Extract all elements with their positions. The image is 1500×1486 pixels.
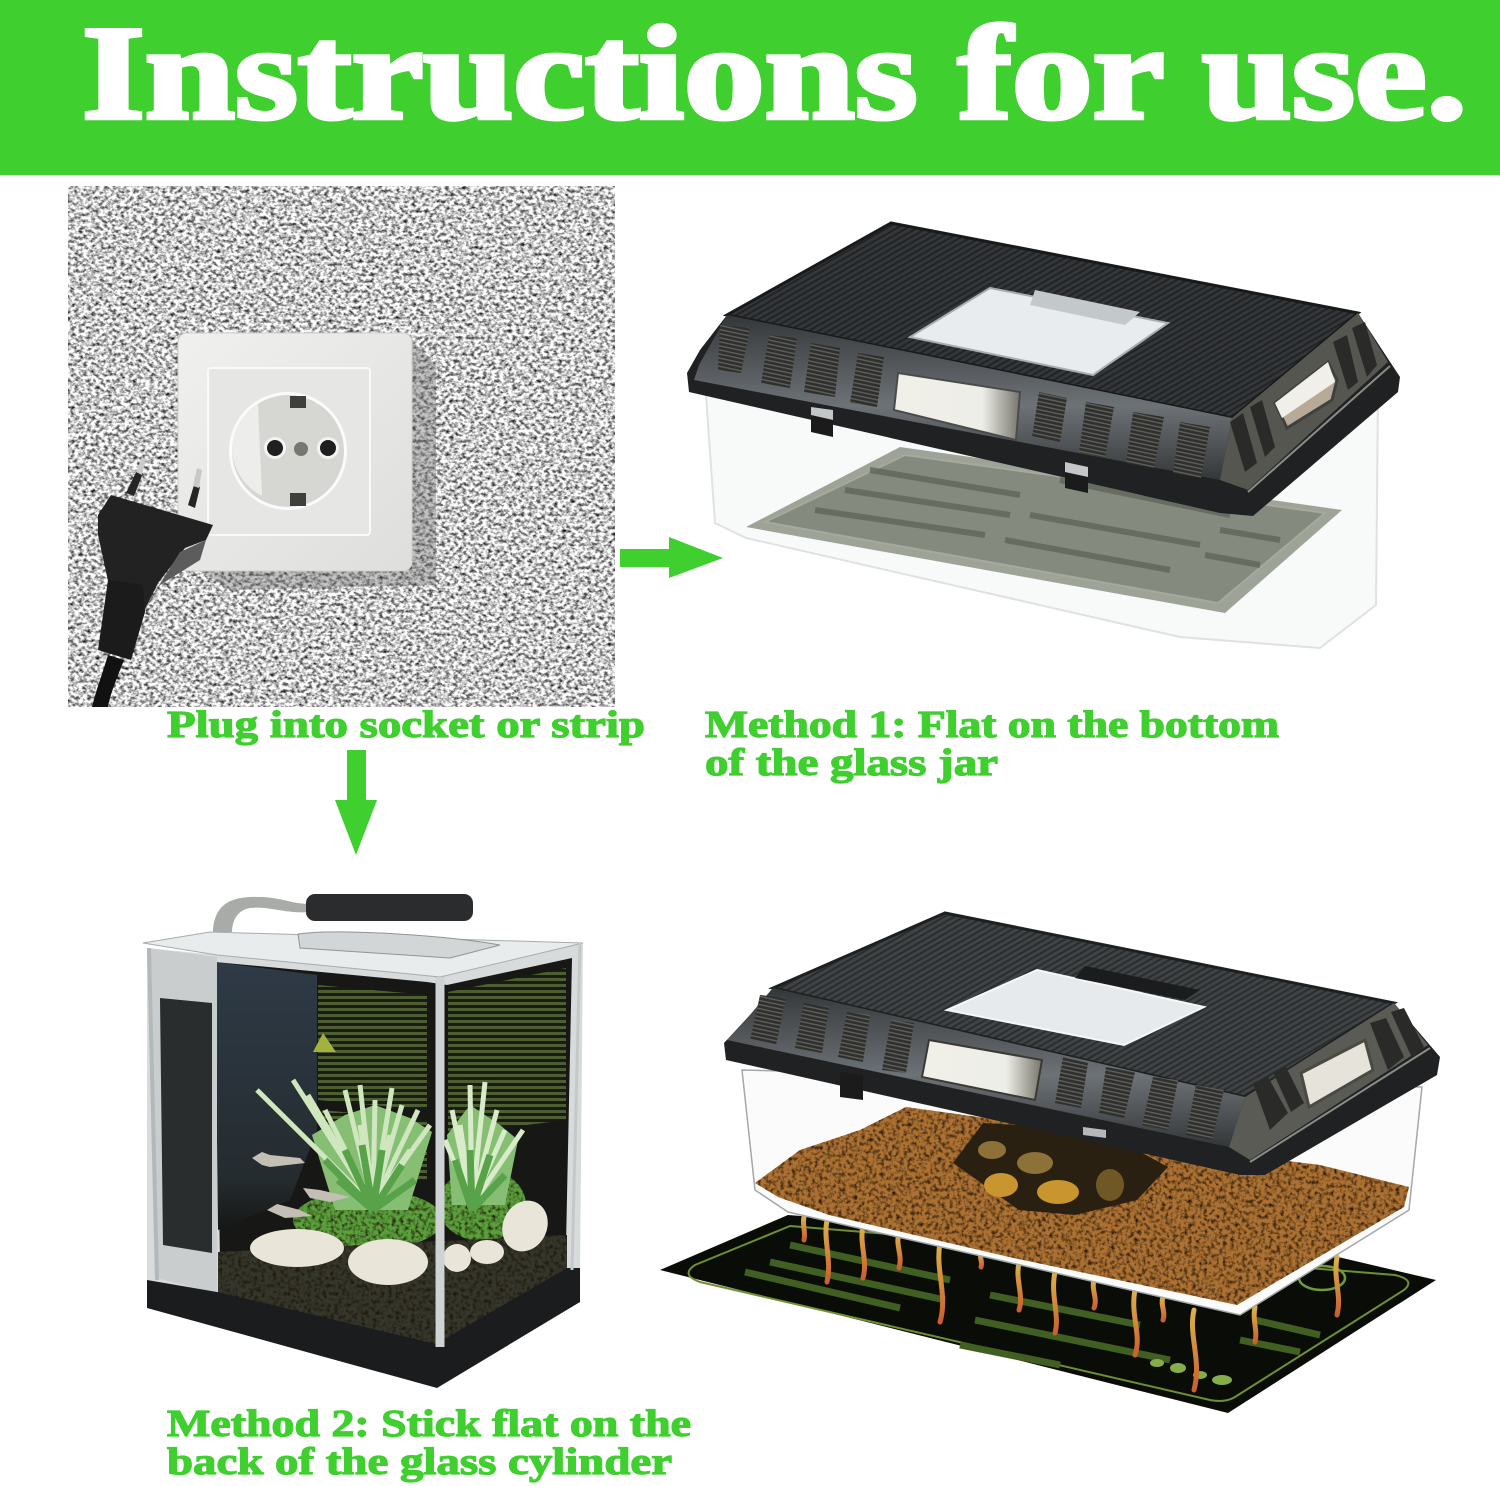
lid body bbox=[724, 913, 1440, 1175]
caption: plug in: Plug into socket or strip bbox=[167, 704, 645, 746]
tank base bbox=[147, 1268, 580, 1388]
window hatch bbox=[947, 970, 1204, 1045]
photo: terrarium above heat mat bbox=[660, 913, 1440, 1413]
lip highlight bbox=[1250, 1048, 1430, 1162]
stones bbox=[250, 1193, 556, 1285]
left grass body bbox=[312, 1105, 432, 1210]
photo: terrarium with mat inside bbox=[687, 223, 1400, 648]
handle and light bbox=[213, 894, 473, 932]
mat icons bbox=[1150, 1359, 1232, 1385]
back mat bbox=[215, 958, 572, 1262]
lid top bbox=[727, 223, 1358, 418]
title: Instructions for use. bbox=[82, 0, 1467, 147]
socket plate bbox=[178, 333, 436, 590]
side latch bbox=[1275, 362, 1337, 428]
caption: method 1: Method 1: Flat on the bottom bbox=[705, 704, 1279, 746]
lid side band bbox=[1220, 313, 1388, 490]
caption: method 2 bbox=[167, 1403, 691, 1483]
caption: method 2: Method 2: Stick flat on the bbox=[167, 1403, 691, 1445]
glass frame edges bbox=[436, 977, 444, 1347]
photo: aquarium with mat on back bbox=[143, 894, 583, 1388]
tank glass body bbox=[147, 943, 583, 1347]
top glass bbox=[143, 932, 583, 977]
window hatch bbox=[910, 288, 1168, 375]
clips bbox=[840, 1072, 1106, 1138]
photo: wall socket with plug bbox=[68, 186, 615, 707]
right grass bbox=[445, 1082, 523, 1205]
plants bbox=[257, 1080, 526, 1250]
logo ring bbox=[1299, 1266, 1345, 1290]
substrate bbox=[755, 1107, 1409, 1305]
lid top bbox=[773, 913, 1394, 1097]
caption: method 1 bbox=[705, 704, 1279, 784]
title banner bbox=[0, 0, 1500, 175]
side latch bbox=[1301, 1040, 1373, 1107]
clear tub bbox=[742, 1070, 1422, 1315]
lid front band bbox=[694, 315, 1232, 480]
plug and cable bbox=[92, 457, 213, 707]
snake bbox=[953, 1123, 1168, 1215]
fish bbox=[252, 1152, 350, 1218]
arrow: socket to method 2 bbox=[335, 750, 377, 855]
bushes bbox=[293, 1190, 443, 1250]
filter column bbox=[147, 948, 217, 1294]
clear tub bbox=[706, 395, 1378, 648]
left grass bbox=[257, 1080, 430, 1205]
right grass body bbox=[447, 1105, 518, 1205]
vents bbox=[750, 995, 1224, 1140]
heat mat bbox=[660, 1215, 1436, 1413]
front latch bbox=[922, 1040, 1042, 1100]
heat lines bbox=[803, 1217, 1339, 1390]
front latch bbox=[894, 373, 1020, 440]
lid side band bbox=[1229, 1003, 1428, 1160]
side vents bbox=[1253, 1008, 1424, 1130]
caption: method 2: back of the glass cylinder bbox=[167, 1441, 672, 1483]
gravel base bbox=[218, 1235, 567, 1346]
arrow: socket to method 1 bbox=[620, 537, 723, 578]
lid body bbox=[687, 223, 1400, 516]
vents bbox=[718, 325, 1210, 478]
lip highlight bbox=[1248, 366, 1390, 492]
caption: method 1: of the glass jar bbox=[705, 742, 998, 784]
clips bbox=[811, 407, 1088, 493]
lid front band bbox=[727, 988, 1245, 1147]
side vents bbox=[1230, 322, 1377, 472]
mat seen through tub bbox=[746, 447, 1342, 613]
